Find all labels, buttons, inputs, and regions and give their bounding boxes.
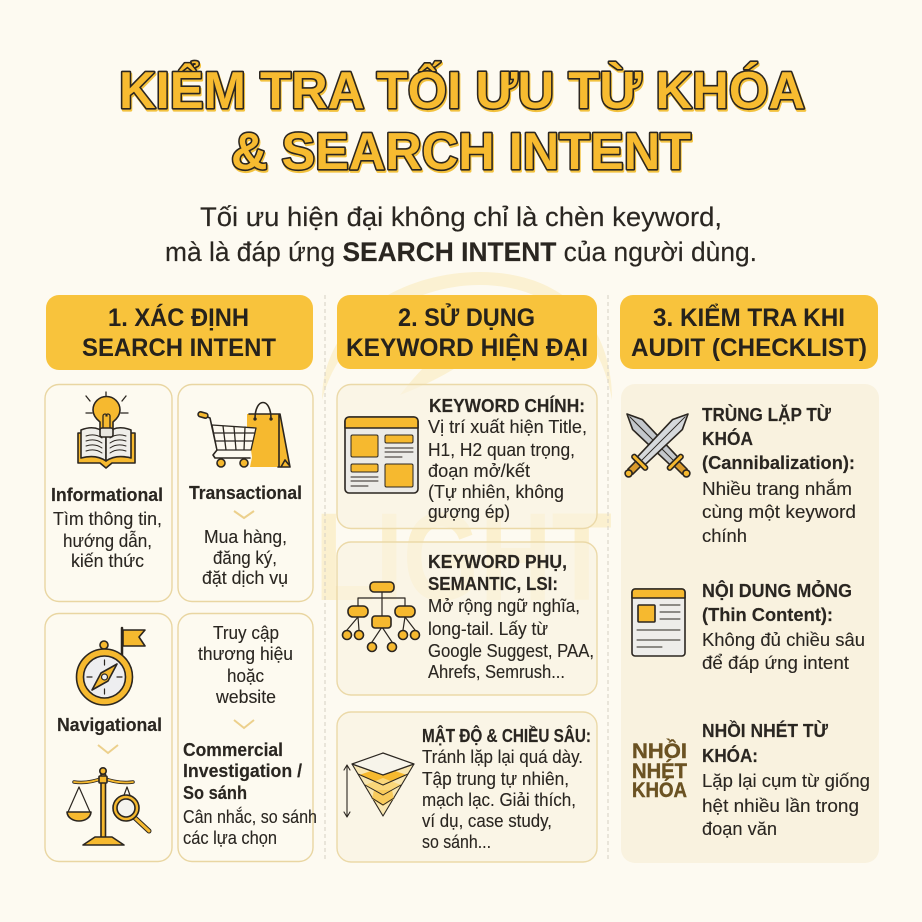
text: Mật độ & chiều sâu: Tập trung tự nhiên, [422, 769, 569, 789]
card: Navigational [45, 614, 172, 862]
description: Informational: hướng dẫn, [63, 530, 152, 551]
description: Navigational: hoặc [227, 666, 264, 686]
card: Transactional [178, 384, 313, 602]
label: Commercial Investigation: So sánh [183, 783, 247, 803]
text: Keyword chính: (Tự nhiên, không [428, 482, 564, 502]
column 1 header: SEARCH INTENT [82, 334, 276, 362]
title: KIỂM TRA TỐI ƯU TỪ KHÓA [119, 61, 805, 120]
text: Keyword phụ: SEMANTIC, LSI: [428, 574, 558, 594]
watermark: LIGHT logo [315, 272, 612, 627]
subtitle: mà là đáp ứng SEARCH INTENT của người dùng. [165, 237, 757, 267]
column 1 header [46, 295, 313, 370]
text: Keyword phụ: Google Suggest, PAA, [428, 641, 594, 661]
column 3 header: AUDIT (CHECKLIST) [631, 334, 867, 362]
description: Informational [53, 509, 162, 571]
card: Keyword phụ [337, 542, 597, 695]
text: Cannibalization: TRÙNG LẶP TỪ [702, 404, 831, 425]
icon: semantic tree [342, 582, 420, 652]
label: Transactional: Transactional [189, 483, 302, 503]
description: Transactional [202, 527, 288, 588]
column 2 header: KEYWORD HIỆN ĐẠI [346, 332, 588, 362]
icon: light bulb over open book [78, 392, 135, 468]
label: Informational: Informational [51, 485, 163, 505]
label: Navigational: Navigational [57, 715, 162, 735]
label: Commercial Investigation: Investigation / [183, 761, 302, 781]
text: Cannibalization [702, 404, 856, 546]
text: Keyword stuffing: NHỒI NHÉT TỪ [702, 720, 828, 741]
description: Transactional: Mua hàng, [204, 527, 287, 547]
card: Keyword chính [337, 384, 597, 528]
column 2 header: 2. SỬ DỤNG [398, 302, 535, 332]
description: Transactional: đăng ký, [213, 548, 277, 568]
description: Navigational: Truy cập [213, 623, 279, 643]
card: Commercial Investigation [178, 614, 317, 862]
icon: webpage layout [345, 417, 418, 493]
icon: keyword stuffing word stack: NHÉT [632, 760, 687, 783]
icon: scales with magnifier [67, 768, 149, 845]
text: Keyword chính: gượng ép) [428, 502, 510, 522]
icon: shopping bag and cart [198, 402, 290, 467]
description: Navigational: website [215, 687, 276, 707]
chevron [98, 745, 118, 753]
icon: keyword stuffing word stack [632, 739, 687, 802]
panel: audit checklist [619, 384, 879, 863]
text: Cannibalization: chính [702, 526, 747, 546]
text: Mật độ & chiều sâu [422, 725, 591, 852]
text: Mật độ & chiều sâu: mạch lạc. Giải thích, [422, 790, 576, 810]
watermark: LIGHT logo: LIGHT [315, 488, 612, 627]
text: Keyword phụ: KEYWORD PHỤ, [428, 552, 567, 572]
text: Thin content: NỘI DUNG MỎNG [702, 580, 852, 601]
column 3 header: 3. KIỂM TRA KHI [653, 303, 845, 332]
description: Informational: kiến thức [71, 551, 144, 571]
title: & SEARCH INTENT [231, 123, 691, 181]
text: Keyword chính [428, 395, 587, 522]
text: Thin content: (Thin Content): [702, 605, 833, 625]
description: Commercial Investigation: các lựa chọn [183, 828, 277, 848]
text: Cannibalization: KHÓA [702, 428, 753, 449]
text: Mật độ & chiều sâu: so sánh... [422, 832, 491, 852]
text: Keyword stuffing: hệt nhiều lần trong [702, 796, 859, 816]
text: Keyword stuffing: đoạn văn [702, 819, 777, 839]
description: Informational: Tìm thông tin, [53, 509, 162, 529]
icon: crossed swords [619, 407, 696, 483]
text: Keyword stuffing: Lặp lại cụm từ giống [702, 771, 870, 791]
card: Mật độ & chiều sâu [337, 712, 597, 862]
text: Thin content: Không đủ chiều sâu [702, 630, 865, 650]
chevron [234, 720, 254, 728]
label: Commercial Investigation [183, 740, 302, 803]
card: Informational [45, 384, 172, 602]
title [119, 61, 805, 181]
text: Keyword phụ [428, 552, 594, 682]
description: Commercial Investigation: Cân nhắc, so sánh [183, 806, 317, 827]
column 3 header [620, 295, 878, 369]
icon: keyword stuffing word stack: NHỒI [632, 739, 687, 763]
text: Keyword chính: Vị trí xuất hiện Title, [428, 417, 587, 437]
subtitle: Tối ưu hiện đại không chỉ là chèn keyword, [200, 202, 722, 232]
text: Keyword chính: đoạn mở/kết [428, 461, 530, 481]
column 2 header [337, 295, 597, 369]
text: Cannibalization: cùng một keyword [702, 502, 856, 522]
column 1 header: 1. XÁC ĐỊNH [108, 303, 249, 332]
description: Transactional: đặt dịch vụ [202, 568, 288, 588]
chevron [234, 511, 254, 518]
text: Cannibalization: Nhiều trang nhắm [702, 478, 852, 499]
icon: keyword stuffing word stack: KHÓA [632, 778, 687, 802]
label: Commercial Investigation: Commercial [183, 740, 283, 760]
text: Keyword stuffing [702, 720, 870, 839]
text: Keyword phụ: Mở rộng ngữ nghĩa, [428, 596, 580, 616]
text: Keyword phụ: long-tail. Lấy từ [428, 619, 548, 639]
text: Mật độ & chiều sâu: MẬT ĐỘ & CHIỀU SÂU: [422, 725, 591, 746]
icon: compass with flag [76, 628, 145, 705]
description: Commercial Investigation [183, 806, 317, 848]
text: Mật độ & chiều sâu: ví dụ, case study, [422, 811, 552, 831]
text: Keyword stuffing: KHÓA: [702, 745, 758, 766]
text: Keyword chính: KEYWORD CHÍNH: [429, 395, 585, 416]
text: Cannibalization: (Cannibalization): [702, 453, 855, 473]
description: Navigational: thương hiệu [198, 644, 293, 664]
subtitle [165, 202, 757, 267]
text: Keyword phụ: Ahrefs, Semrush... [428, 662, 565, 682]
icon: depth funnel with arrow [344, 753, 414, 817]
text: Keyword chính: H1, H2 quan trọng, [428, 440, 575, 460]
text: Mật độ & chiều sâu: Tránh lặp lại quá dày. [422, 747, 583, 767]
text: Thin content: để đáp ứng intent [702, 653, 849, 673]
text: Thin content [702, 580, 865, 673]
icon: thin content page [632, 589, 685, 656]
description: Navigational [198, 623, 293, 707]
